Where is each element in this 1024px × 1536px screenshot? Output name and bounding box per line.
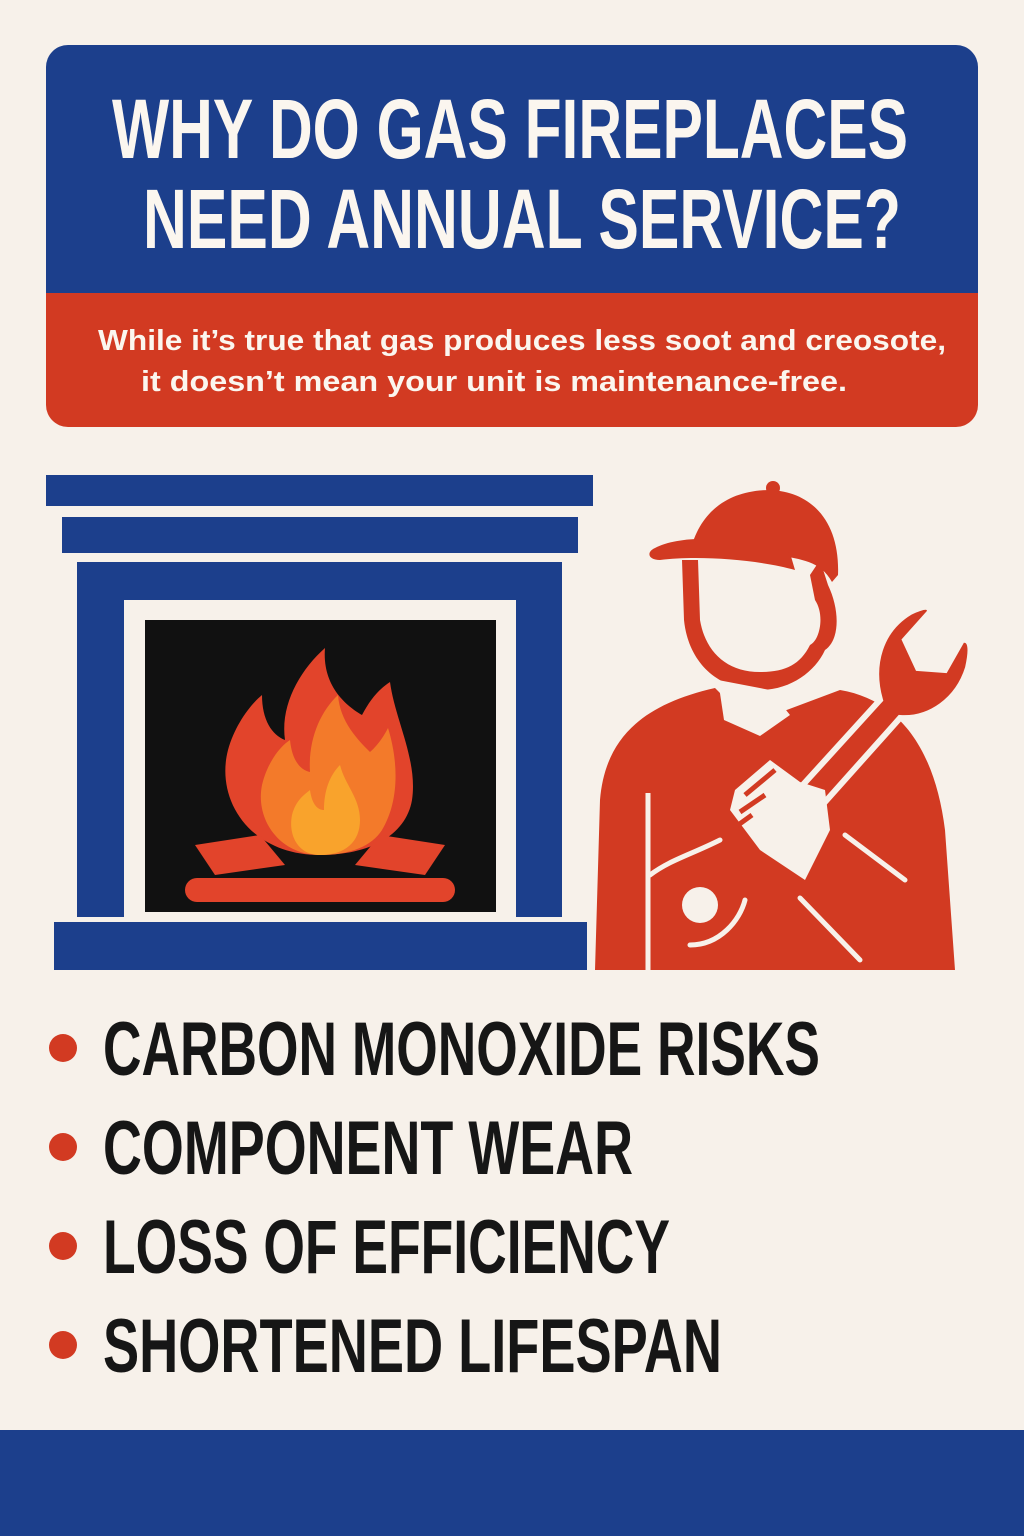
bullet: lifespan	[49, 1304, 722, 1389]
header panel	[46, 45, 978, 427]
title	[112, 82, 908, 266]
face outline	[682, 560, 837, 690]
body lines	[646, 793, 650, 970]
body	[595, 688, 955, 970]
icon: fire	[185, 648, 455, 902]
hand	[730, 760, 830, 880]
illustration: fireplace	[46, 475, 593, 970]
illustration: technician with wrench	[595, 481, 970, 970]
cap	[690, 490, 838, 582]
bullet: efficiency	[49, 1205, 670, 1290]
bullet: component wear: COMPONENT WEAR	[103, 1106, 633, 1191]
bullet: lifespan: SHORTENED LIFESPAN	[103, 1304, 722, 1389]
subtitle: it doesn’t mean your unit is maintenance-free.	[141, 366, 847, 398]
bullet: component wear	[49, 1106, 633, 1191]
footer band	[0, 1430, 1024, 1536]
wrench	[780, 607, 970, 830]
bullet: efficiency: LOSS OF EFFICIENCY	[103, 1205, 670, 1290]
subtitle	[98, 325, 946, 398]
subtitle: While it’s true that gas produces less soot and creosote,	[98, 325, 946, 357]
bullet list	[49, 1007, 820, 1389]
